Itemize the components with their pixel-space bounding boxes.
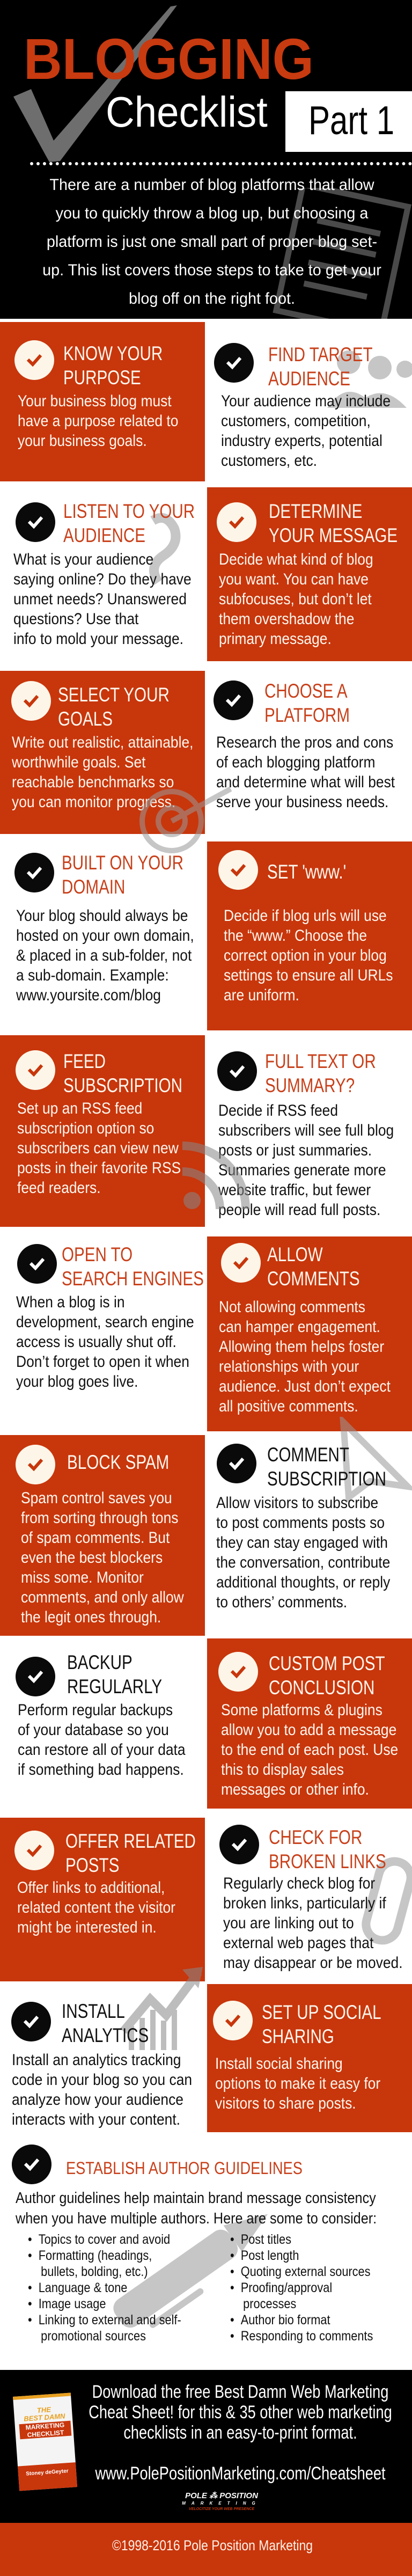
- body: Some platforms & plugins: [221, 1701, 382, 1719]
- heading: ESTABLISH AUTHOR GUIDELINES: [66, 2158, 303, 2178]
- icon: link watermark: [362, 1855, 412, 1952]
- body: all positive comments.: [219, 1397, 358, 1415]
- body: reachable benchmarks so: [12, 773, 174, 791]
- list: right column: • Post titles: [230, 2232, 291, 2247]
- body: Perform regular backups: [18, 1701, 173, 1719]
- list: right column: • Author bio format: [230, 2312, 330, 2328]
- body: [224, 907, 393, 1004]
- body: can restore all of your data: [18, 1741, 186, 1759]
- body: additional thoughts, or reply: [216, 1574, 390, 1591]
- heading: DETERMINE: [269, 500, 362, 522]
- body: saying online? Do they have: [13, 570, 192, 588]
- intro text: [42, 176, 381, 308]
- heading: [264, 680, 350, 726]
- body: of your database so you: [18, 1721, 169, 1739]
- badge: Part 1: Part 1: [308, 98, 394, 143]
- body: of spam comments. But: [21, 1529, 170, 1547]
- heading: [267, 1243, 360, 1290]
- body: questions? Use that: [13, 610, 138, 628]
- body: Offer links to additional,: [17, 1879, 165, 1897]
- heading: AUDIENCE: [268, 368, 350, 390]
- body: Install an analytics tracking: [12, 2051, 181, 2069]
- body: Research the pros and cons: [216, 734, 393, 751]
- body: settings to ensure all URLs: [224, 967, 393, 984]
- body: Install social sharing: [215, 2055, 343, 2073]
- body: Decide if blog urls will use: [224, 907, 387, 925]
- icon: analytics watermark: [118, 1967, 204, 2053]
- body: Summaries generate more: [218, 1161, 386, 1179]
- body: correct option in your blog: [224, 947, 387, 964]
- body: [16, 1293, 194, 1391]
- icon: people watermark: [327, 350, 412, 408]
- panel: know your purpose: [0, 322, 205, 481]
- body: even the best blockers: [21, 1549, 163, 1567]
- body: audience. Just don’t expect: [219, 1378, 391, 1395]
- body: allow you to add a message: [221, 1721, 396, 1739]
- icon: ear watermark: [149, 513, 180, 585]
- body: visitors to share posts.: [215, 2095, 356, 2112]
- panel: listen to your audience: [13, 500, 195, 648]
- icon: check: [16, 1657, 55, 1696]
- icon: check: [16, 502, 55, 542]
- body: [16, 2188, 377, 2229]
- icon: check: [214, 343, 254, 383]
- heading: COMMENT: [267, 1444, 349, 1466]
- heading: [67, 1650, 162, 1699]
- icon: document: [273, 188, 411, 319]
- list: left column: • Linking to external and self-: [28, 2312, 181, 2328]
- logo: pole position marketing: [176, 2492, 267, 2514]
- panel: set up social sharing: [207, 1984, 412, 2132]
- intro text: blog off on the right foot.: [129, 290, 295, 308]
- panel: custom post conclusion: [207, 1638, 412, 1809]
- panel: block spam: [0, 1435, 205, 1636]
- heading: [262, 2000, 381, 2048]
- body: access is usually shut off.: [16, 1333, 176, 1351]
- body: from sorting through tons: [21, 1509, 178, 1527]
- body: subfocuses, but don’t let: [219, 590, 372, 608]
- body: the conversation, contribute: [216, 1554, 390, 1571]
- body: subscribers will see full blog: [218, 1122, 394, 1139]
- body: & placed in a sub-folder, not: [16, 947, 192, 964]
- panel: built on your domain: [14, 852, 194, 1004]
- icon: rss watermark: [182, 1141, 250, 1209]
- body: Your blog should always be: [16, 907, 188, 925]
- icon: check: [16, 1445, 55, 1484]
- body: [223, 1874, 403, 1973]
- body: serve your business needs.: [216, 793, 388, 811]
- text: download call to action: checklists in an easy-to-print format.: [123, 2423, 357, 2443]
- heading: PLATFORM: [264, 704, 350, 726]
- list: left column: • Formatting (headings,: [28, 2248, 152, 2263]
- body: you can monitor progress.: [12, 793, 175, 811]
- icon: check: [213, 2001, 253, 2040]
- heading: [62, 1999, 149, 2047]
- body: external web pages that: [223, 1934, 373, 1952]
- body: worthwhile goals. Set: [12, 753, 145, 771]
- body: Decide what kind of blog: [219, 551, 373, 568]
- icon: check: [11, 681, 51, 721]
- panel: allow comments: [207, 1236, 412, 1431]
- body: subscription option so: [17, 1119, 154, 1137]
- icon: check: [16, 1050, 55, 1090]
- icon: check: [14, 1831, 54, 1870]
- panel: select your goals: [0, 671, 205, 834]
- intro text: platform is just one small part of proper blog set-: [47, 233, 377, 251]
- icon: target watermark: [139, 787, 232, 853]
- heading: BACKUP: [67, 1651, 133, 1673]
- body: Don’t forget to open it when: [16, 1353, 189, 1371]
- body: Write out realistic, attainable,: [12, 734, 193, 751]
- body: miss some. Monitor: [21, 1569, 144, 1586]
- heading: AUDIENCE: [63, 524, 145, 546]
- panel: check for broken links: [206, 1818, 412, 1981]
- subtitle: Checklist: Checklist: [106, 88, 268, 136]
- body: interacts with your content.: [12, 2111, 180, 2128]
- body: of each blogging platform: [216, 753, 375, 771]
- heading: BUILT ON YOUR: [62, 852, 183, 874]
- body: to post comments posts so: [216, 1514, 385, 1532]
- heading: [267, 1444, 386, 1490]
- heading: REGULARLY: [67, 1675, 162, 1697]
- body: What is your audience: [13, 551, 153, 568]
- body: to the end of each post. Use: [221, 1741, 398, 1759]
- icon: check: [214, 680, 253, 720]
- heading: SET UP SOCIAL: [262, 2001, 381, 2023]
- text: download call to action: Cheat Sheet! for this & 35 other web marketing: [89, 2402, 392, 2423]
- heading: DOMAIN: [62, 876, 125, 898]
- body: related content the visitor: [17, 1899, 175, 1916]
- heading: PURPOSE: [63, 367, 141, 389]
- body: posts or just summaries.: [218, 1141, 372, 1159]
- body: have a purpose related to: [18, 412, 178, 430]
- body: unmet needs? Unanswered: [13, 590, 187, 608]
- body: [21, 1489, 184, 1626]
- body: subscribers can view new: [17, 1139, 179, 1157]
- body: [219, 551, 373, 648]
- body: and determine what will best: [216, 773, 395, 791]
- body: [13, 551, 192, 648]
- icon: pen watermark: [91, 2197, 295, 2336]
- body: messages or other info.: [221, 1781, 369, 1798]
- intro text: you to quickly throw a blog up, but choosing a: [56, 204, 368, 222]
- body: Spam control saves you: [21, 1489, 172, 1507]
- list: left column: • Image usage: [28, 2296, 106, 2311]
- body: this to display sales: [221, 1761, 344, 1779]
- body: [16, 907, 194, 1004]
- logo: pole position marketing: MARKETING: [182, 2501, 261, 2506]
- body: [216, 734, 395, 811]
- body: Your audience may include: [221, 392, 391, 410]
- image: book: [13, 2392, 77, 2491]
- heading: SUBSCRIPTION: [63, 1074, 182, 1096]
- panel: establish author guidelines: [0, 2132, 412, 2370]
- body: the “www.” Choose the: [224, 927, 367, 945]
- heading: [62, 852, 183, 898]
- body: [17, 1100, 181, 1197]
- icon: check: [218, 1652, 258, 1692]
- icon: check: [221, 1243, 261, 1283]
- title: BLOGGING: BLOGGING: [24, 26, 314, 91]
- body: hosted on your own domain,: [16, 927, 194, 945]
- heading: [269, 1825, 386, 1874]
- heading: FULL TEXT OR: [265, 1050, 376, 1072]
- list: left column: bullets, bolding, etc.): [41, 2264, 148, 2279]
- body: if something bad happens.: [18, 1761, 184, 1779]
- body: you are linking out to: [223, 1914, 354, 1932]
- list: left column: • Language & tone: [28, 2280, 127, 2295]
- body: might be interested in.: [17, 1919, 157, 1936]
- body: website traffic, but fewer: [218, 1181, 371, 1199]
- icon: cursor watermark: [340, 1417, 412, 1503]
- list: right column: • Responding to comments: [230, 2329, 373, 2344]
- heading: [63, 342, 163, 389]
- body: are uniform.: [224, 986, 299, 1004]
- body: [17, 1878, 175, 1937]
- heading: GOALS: [58, 708, 113, 730]
- body: you want. You can have: [219, 570, 369, 588]
- heading: YOUR MESSAGE: [269, 524, 398, 546]
- icon: check: [11, 2002, 51, 2041]
- heading: SET 'www.': [267, 861, 346, 883]
- image: book: CHECKLIST: [27, 2429, 64, 2439]
- heading: CONCLUSION: [269, 1677, 374, 1699]
- heading: CHOOSE A: [264, 680, 348, 702]
- body: can hamper engagement.: [219, 1318, 380, 1336]
- icon: grey checkmark: [13, 5, 177, 162]
- body: analyze how your audience: [12, 2091, 183, 2109]
- icon: check: [217, 1051, 257, 1091]
- body: [18, 392, 178, 450]
- body: [12, 2050, 192, 2129]
- body: options to make it easy for: [215, 2075, 380, 2092]
- list: right column: • Post length: [230, 2248, 299, 2263]
- heading: [62, 1243, 204, 1290]
- heading: SELECT YOUR: [58, 684, 170, 706]
- heading: [269, 1651, 385, 1700]
- panel: find target audience: [214, 343, 391, 470]
- body: broken links, particularly if: [223, 1894, 386, 1912]
- heading: ANALYTICS: [62, 2024, 149, 2046]
- body: [215, 2054, 380, 2113]
- list: left column: [28, 2231, 181, 2344]
- footer: copyright: [0, 2523, 412, 2576]
- heading: [63, 1050, 182, 1096]
- body: may disappear or be moved.: [223, 1954, 403, 1972]
- body: [18, 1700, 186, 1780]
- body: Set up an RSS feed: [17, 1100, 142, 1117]
- icon: check: [217, 502, 256, 542]
- logo: pole position marketing: POLE ⁂ POSITION: [185, 2491, 258, 2500]
- heading: SUBSCRIPTION: [267, 1468, 386, 1490]
- heading: [269, 500, 398, 546]
- body: customers, competition,: [221, 412, 371, 430]
- heading: [265, 1050, 376, 1096]
- image: book: BEST DAMN: [24, 2412, 65, 2423]
- body: primary message.: [219, 630, 332, 648]
- list: right column: • Quoting external sources: [230, 2264, 371, 2279]
- icon: check: [12, 2145, 52, 2184]
- heading: POSTS: [65, 1854, 119, 1876]
- text: download call to action: www.PolePositionMarketing.com/Cheatsheet: [95, 2463, 386, 2484]
- list: right column: processes: [243, 2296, 296, 2311]
- body: customers, etc.: [221, 452, 317, 470]
- body: Decide if RSS feed: [218, 1102, 338, 1119]
- body: to others’ comments.: [216, 1593, 347, 1611]
- heading: BROKEN LINKS: [269, 1850, 386, 1872]
- heading: ALLOW: [267, 1243, 323, 1265]
- body: posts in their favorite RSS: [17, 1159, 181, 1177]
- body: [221, 1700, 398, 1799]
- panel: determine your message: [207, 487, 412, 661]
- image: book: MARKETING: [25, 2421, 65, 2431]
- body: [12, 734, 193, 811]
- body: your business goals.: [18, 432, 147, 450]
- panel: comment subscription: [216, 1444, 391, 1611]
- body: [216, 1493, 390, 1612]
- header: [0, 0, 412, 319]
- heading: INSTALL: [62, 2000, 125, 2022]
- badge: Part 1: [285, 91, 412, 152]
- heading: SEARCH ENGINES: [62, 1268, 204, 1290]
- body: When a blog is in: [16, 1293, 125, 1311]
- body: a sub-domain. Example:: [16, 967, 169, 984]
- logo: pole position marketing: VELOCITIZE YOUR WEB PRESENCE: [189, 2507, 254, 2511]
- icon: check: [218, 850, 258, 890]
- heading: BLOCK SPAM: [67, 1451, 169, 1473]
- footer: copyright: ©1998-2016 Pole Position Marketing: [112, 2537, 313, 2553]
- intro text: There are a number of blog platforms that allow: [49, 176, 374, 194]
- body: info to mold your message.: [13, 630, 183, 648]
- heading: SHARING: [262, 2025, 334, 2047]
- image: book: THE: [36, 2405, 51, 2414]
- body: [219, 1298, 391, 1415]
- text: download call to action: Download the free Best Damn Web Marketing: [92, 2382, 388, 2402]
- body: Author guidelines help maintain brand message consistency: [16, 2190, 376, 2207]
- heading: OPEN TO: [62, 1243, 133, 1265]
- icon: check: [217, 1444, 256, 1483]
- body: the legit ones through.: [21, 1608, 161, 1626]
- body: Not allowing comments: [219, 1298, 365, 1316]
- icon: check: [14, 853, 54, 892]
- heading: [63, 500, 195, 546]
- list: left column: promotional sources: [41, 2329, 146, 2344]
- body: people will read full posts.: [218, 1201, 380, 1219]
- body: www.yoursite.com/blog: [16, 986, 161, 1004]
- body: comments, and only allow: [21, 1589, 184, 1606]
- body: Your business blog must: [18, 392, 172, 410]
- intro text: up. This list covers those steps to take to get your: [42, 261, 381, 279]
- panel: backup regularly: [0, 1638, 206, 1809]
- body: industry experts, potential: [221, 432, 382, 450]
- body: your blog goes live.: [16, 1373, 138, 1391]
- panel: set www: [207, 841, 412, 1030]
- panel: choose a platform: [214, 680, 395, 811]
- panel: install analytics: [0, 1984, 206, 2132]
- heading: CHECK FOR: [269, 1826, 362, 1848]
- heading: COMMENTS: [267, 1268, 360, 1290]
- body: they can stay engaged with: [216, 1534, 388, 1552]
- icon: check: [219, 1825, 259, 1864]
- body: them overshadow the: [219, 610, 354, 628]
- body: [218, 1102, 394, 1219]
- panel: open to search engines: [16, 1243, 204, 1391]
- heading: CUSTOM POST: [269, 1652, 385, 1674]
- heading: [65, 1829, 196, 1877]
- image: book: Stoney deGeyter: [26, 2468, 69, 2477]
- body: code in your blog so you can: [12, 2071, 192, 2089]
- list: left column: • Topics to cover and avoid: [28, 2232, 170, 2247]
- body: Allowing them helps foster: [219, 1338, 384, 1356]
- panel: offer related posts: [0, 1818, 205, 1981]
- heading: FIND TARGET: [268, 343, 373, 365]
- list: right column: [230, 2231, 373, 2344]
- heading: SUMMARY?: [265, 1074, 355, 1096]
- body: [221, 392, 391, 470]
- icon: check: [14, 340, 54, 380]
- heading: [58, 684, 170, 730]
- icon: check: [17, 1244, 57, 1284]
- body: feed readers.: [17, 1179, 101, 1197]
- body: Allow visitors to subscribe: [216, 1494, 378, 1512]
- heading: OFFER RELATED: [65, 1830, 196, 1852]
- body: relationships with your: [219, 1358, 359, 1375]
- footer: cheat sheet promo: [0, 2370, 412, 2523]
- heading: FEED: [63, 1050, 106, 1072]
- heading: KNOW YOUR: [63, 342, 163, 364]
- panel: full text or summary: [217, 1050, 394, 1219]
- heading: LISTEN TO YOUR: [63, 500, 195, 522]
- text: download call to action: [47, 2382, 412, 2484]
- body: when you have multiple authors. Here are some to consider:: [16, 2210, 377, 2227]
- list: right column: • Proofing/approval: [230, 2280, 332, 2295]
- panel: feed subscription: [0, 1035, 205, 1227]
- heading: [268, 343, 373, 390]
- body: Regularly check blog for: [223, 1875, 375, 1892]
- body: development, search engine: [16, 1313, 194, 1331]
